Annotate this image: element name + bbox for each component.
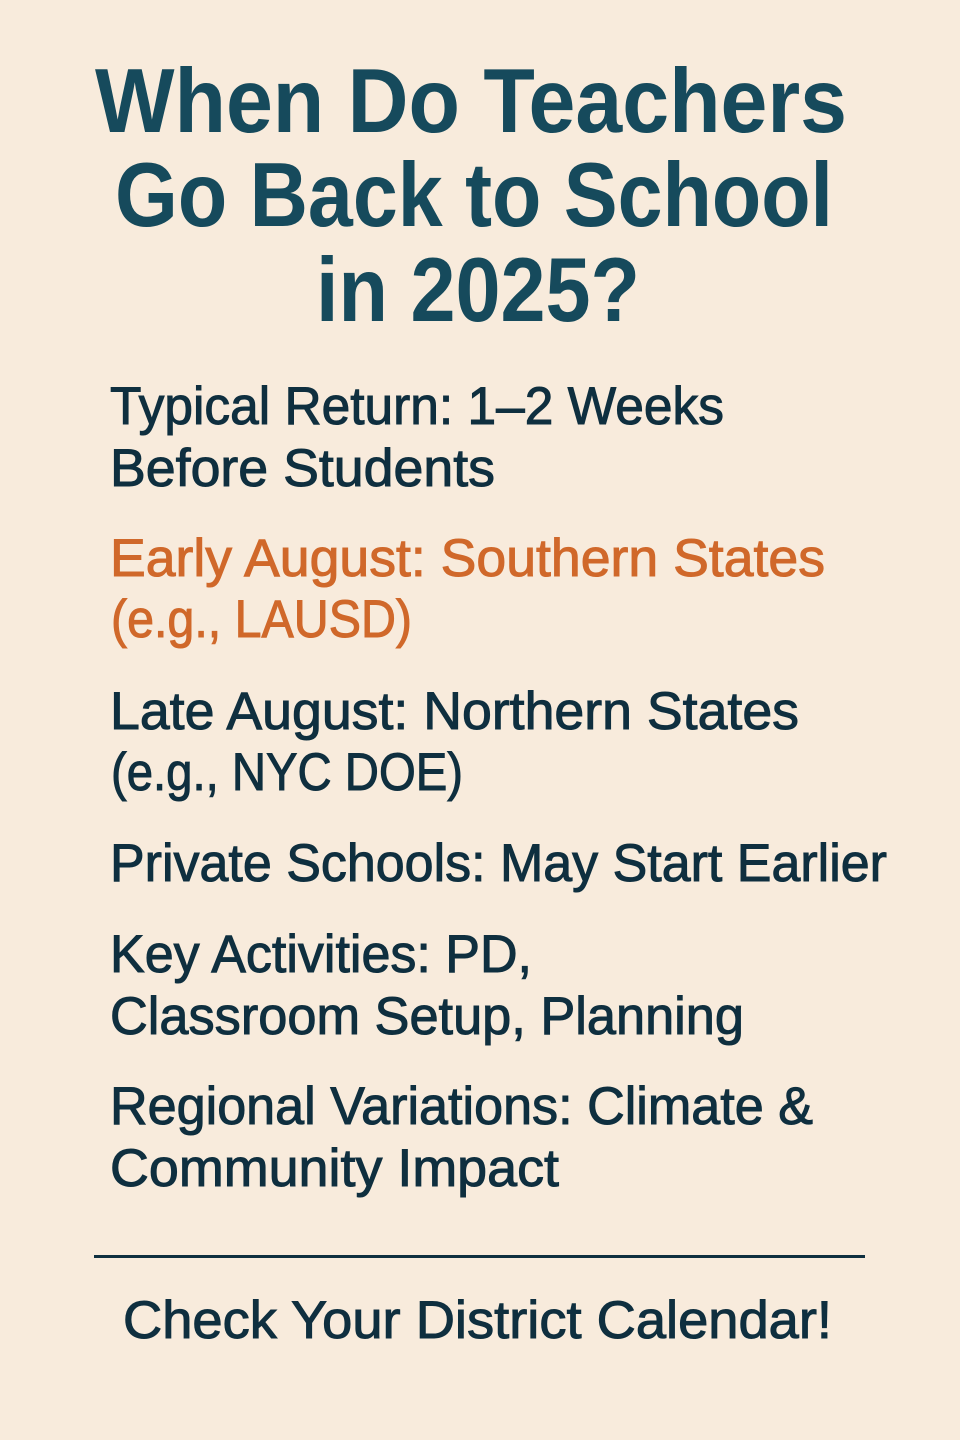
- text: key activities: Key Activities: PD,: [110, 925, 532, 984]
- text: regional variations: Regional Variations: Climate &: [110, 1077, 813, 1136]
- text: late August: (e.g., NYC DOE): [111, 743, 463, 802]
- text: late August: Late August: Northern States: [110, 682, 799, 741]
- text: private schools: Private Schools: May Start Earlier: [110, 834, 887, 893]
- text: typical return: Typical Return: 1–2 Weeks: [110, 377, 724, 436]
- call to action: Check Your District Calendar!: [123, 1291, 832, 1350]
- divider line: [94, 1255, 865, 1258]
- text: early August (highlighted): [110, 529, 825, 649]
- title: in 2025?: [316, 240, 640, 341]
- text: regional variations: [110, 1077, 813, 1198]
- text: typical return: [110, 377, 724, 498]
- text: regional variations: Community Impact: [110, 1139, 559, 1198]
- title: [95, 51, 847, 341]
- title: When Do Teachers: [95, 51, 847, 152]
- text: typical return: Before Students: [110, 439, 495, 498]
- text: key activities: Classroom Setup, Planning: [110, 987, 744, 1046]
- text: early August (highlighted): (e.g., LAUSD): [111, 590, 412, 649]
- text: key activities: [110, 925, 744, 1046]
- text: early August (highlighted): Early August: Southern States: [110, 529, 825, 588]
- title: Go Back to School: [115, 145, 833, 246]
- text: late August: [110, 682, 799, 802]
